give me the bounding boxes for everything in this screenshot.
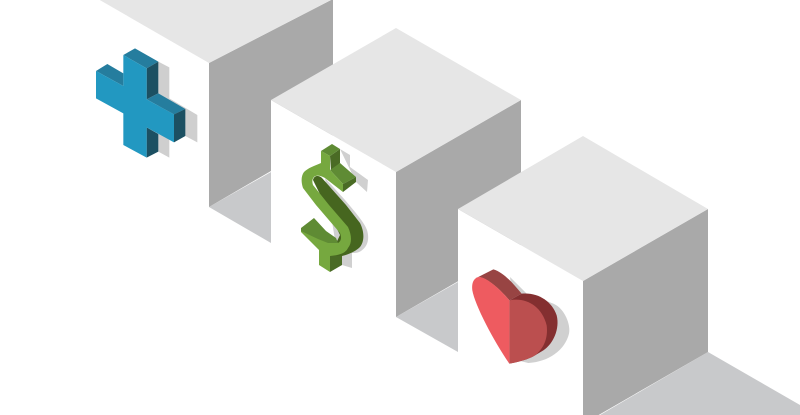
icon: heart bbox=[472, 269, 569, 364]
icon: medical cross bbox=[96, 48, 197, 158]
block 3 bbox=[458, 136, 800, 415]
block 1 bbox=[98, 0, 333, 243]
block 2 bbox=[271, 28, 521, 352]
icon: dollar sign bbox=[301, 144, 368, 272]
